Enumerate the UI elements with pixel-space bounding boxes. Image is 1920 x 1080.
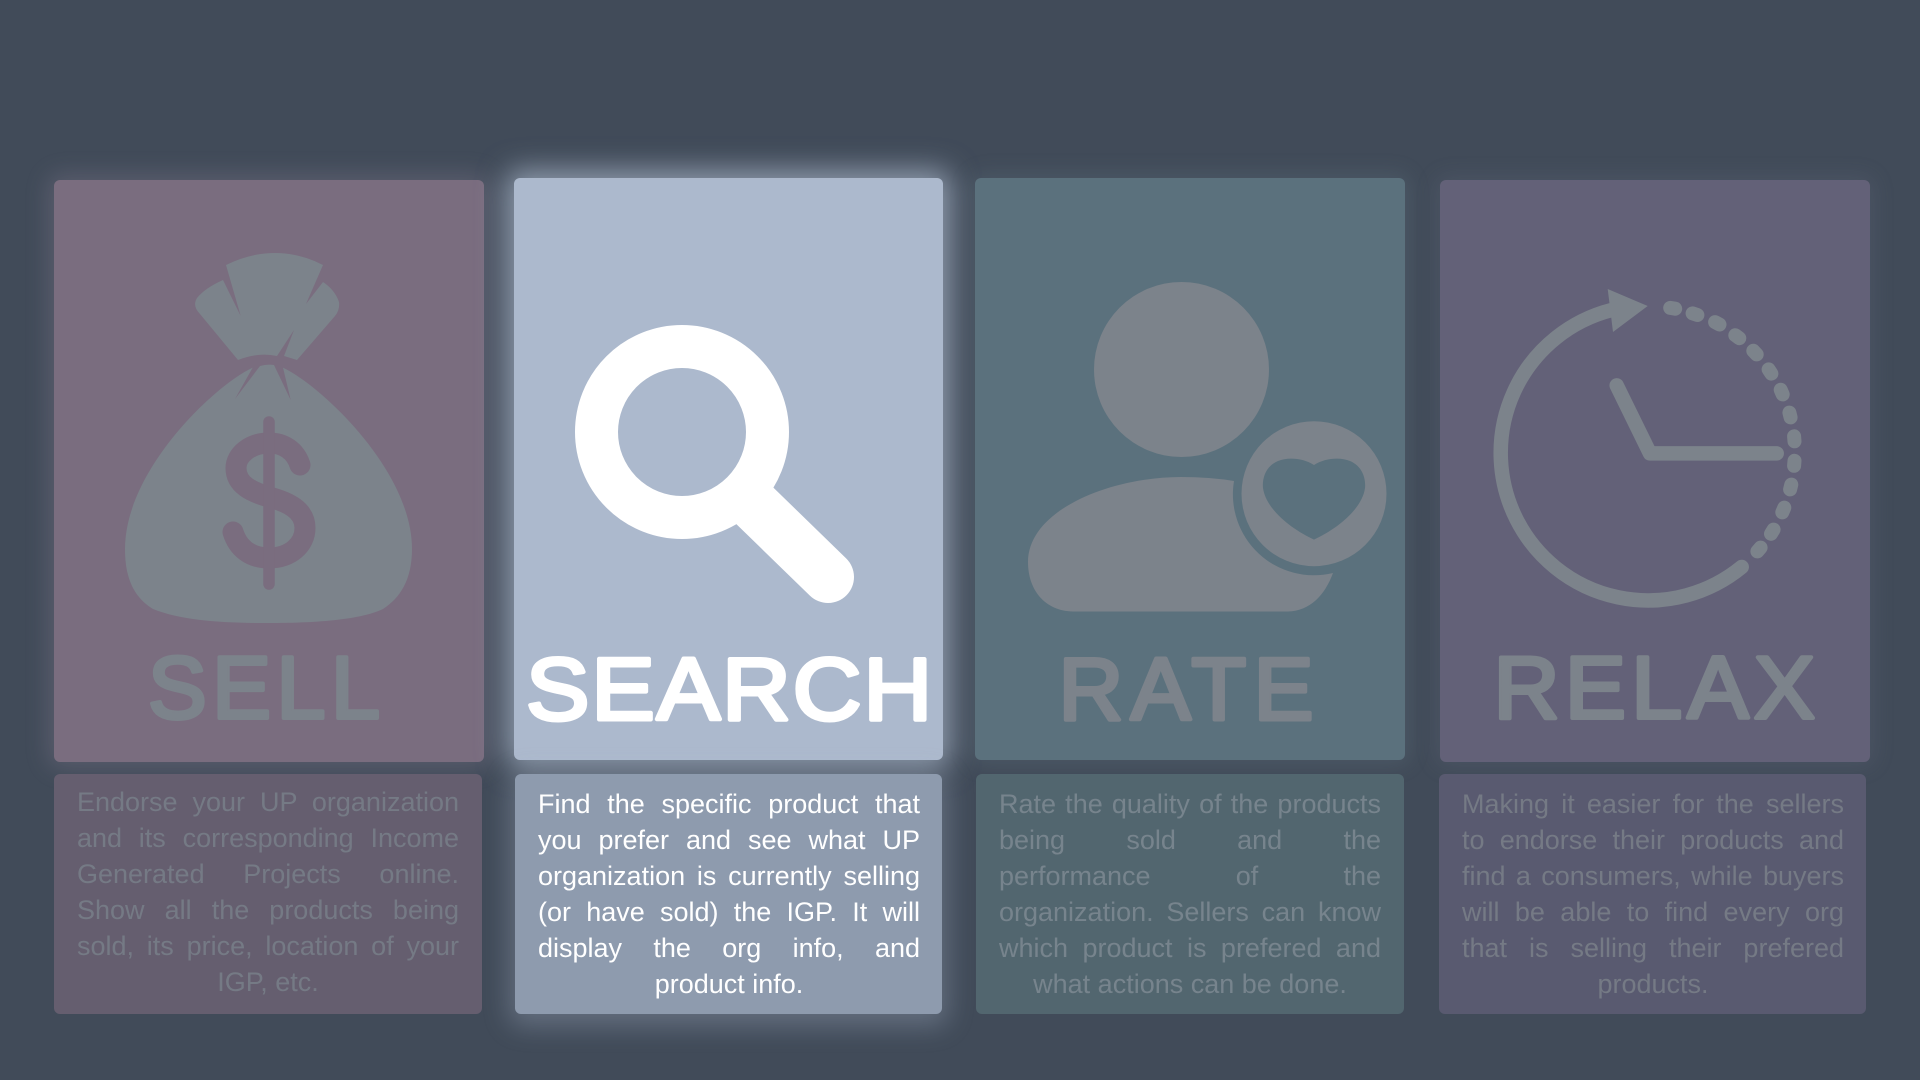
- text block: search description: (or have sold) the IGP. It will: [538, 897, 920, 927]
- text block: search description: you prefer and see what UP: [538, 825, 920, 855]
- text block: rate description: being sold and the: [999, 825, 1381, 855]
- text block: relax description: will be able to find every org: [1462, 897, 1844, 927]
- text block: relax description: Making it easier for the sellers: [1462, 789, 1844, 819]
- text block: sell description: and its corresponding Income: [77, 823, 459, 853]
- panel: relax: [1440, 180, 1870, 762]
- text block: relax description: products.: [1597, 969, 1709, 999]
- text block: rate description: what actions can be done.: [1033, 969, 1347, 999]
- heading: search: SEARCH: [526, 641, 932, 739]
- icon: user with heart: [1028, 282, 1386, 612]
- panel: search: [514, 178, 943, 760]
- text block: rate description: performance of the: [999, 861, 1381, 891]
- text block: search description: organization is currently selling: [538, 861, 920, 891]
- heading: rate: RATE: [1058, 640, 1313, 738]
- heading: sell: SELL: [148, 638, 380, 737]
- text block: search description: display the org info, and: [538, 933, 920, 963]
- text block: sell description: [54, 774, 482, 1014]
- icon: clock with arrow: [1501, 289, 1794, 600]
- text block: search description: Find the specific product that: [538, 789, 920, 819]
- panel: rate: [975, 178, 1405, 760]
- icon: magnifying glass: [596, 346, 828, 577]
- panel: sell: [54, 180, 484, 762]
- text block: sell description: Show all the products being: [77, 895, 459, 925]
- text block: sell description: IGP, etc.: [217, 967, 319, 997]
- heading: relax: RELAX: [1494, 640, 1815, 738]
- text block: search description: product info.: [655, 969, 803, 999]
- text block: rate description: [976, 774, 1404, 1014]
- text block: rate description: organization. Sellers can know: [999, 897, 1381, 927]
- text block: rate description: Rate the quality of the products: [999, 789, 1381, 819]
- text block: relax description: that is selling their prefered: [1462, 933, 1844, 963]
- text block: sell description: Endorse your UP organization: [77, 787, 459, 817]
- text block: search description: [515, 774, 942, 1014]
- text block: relax description: [1439, 774, 1866, 1014]
- text block: relax description: to endorse their products and: [1462, 825, 1844, 855]
- text block: relax description: find a consumers, while buyers: [1462, 861, 1844, 891]
- text block: sell description: sold, its price, location of your: [77, 931, 459, 961]
- text block: sell description: Generated Projects online.: [77, 859, 459, 889]
- text block: rate description: which product is prefered and: [999, 933, 1381, 963]
- icon: money bag: [125, 253, 412, 623]
